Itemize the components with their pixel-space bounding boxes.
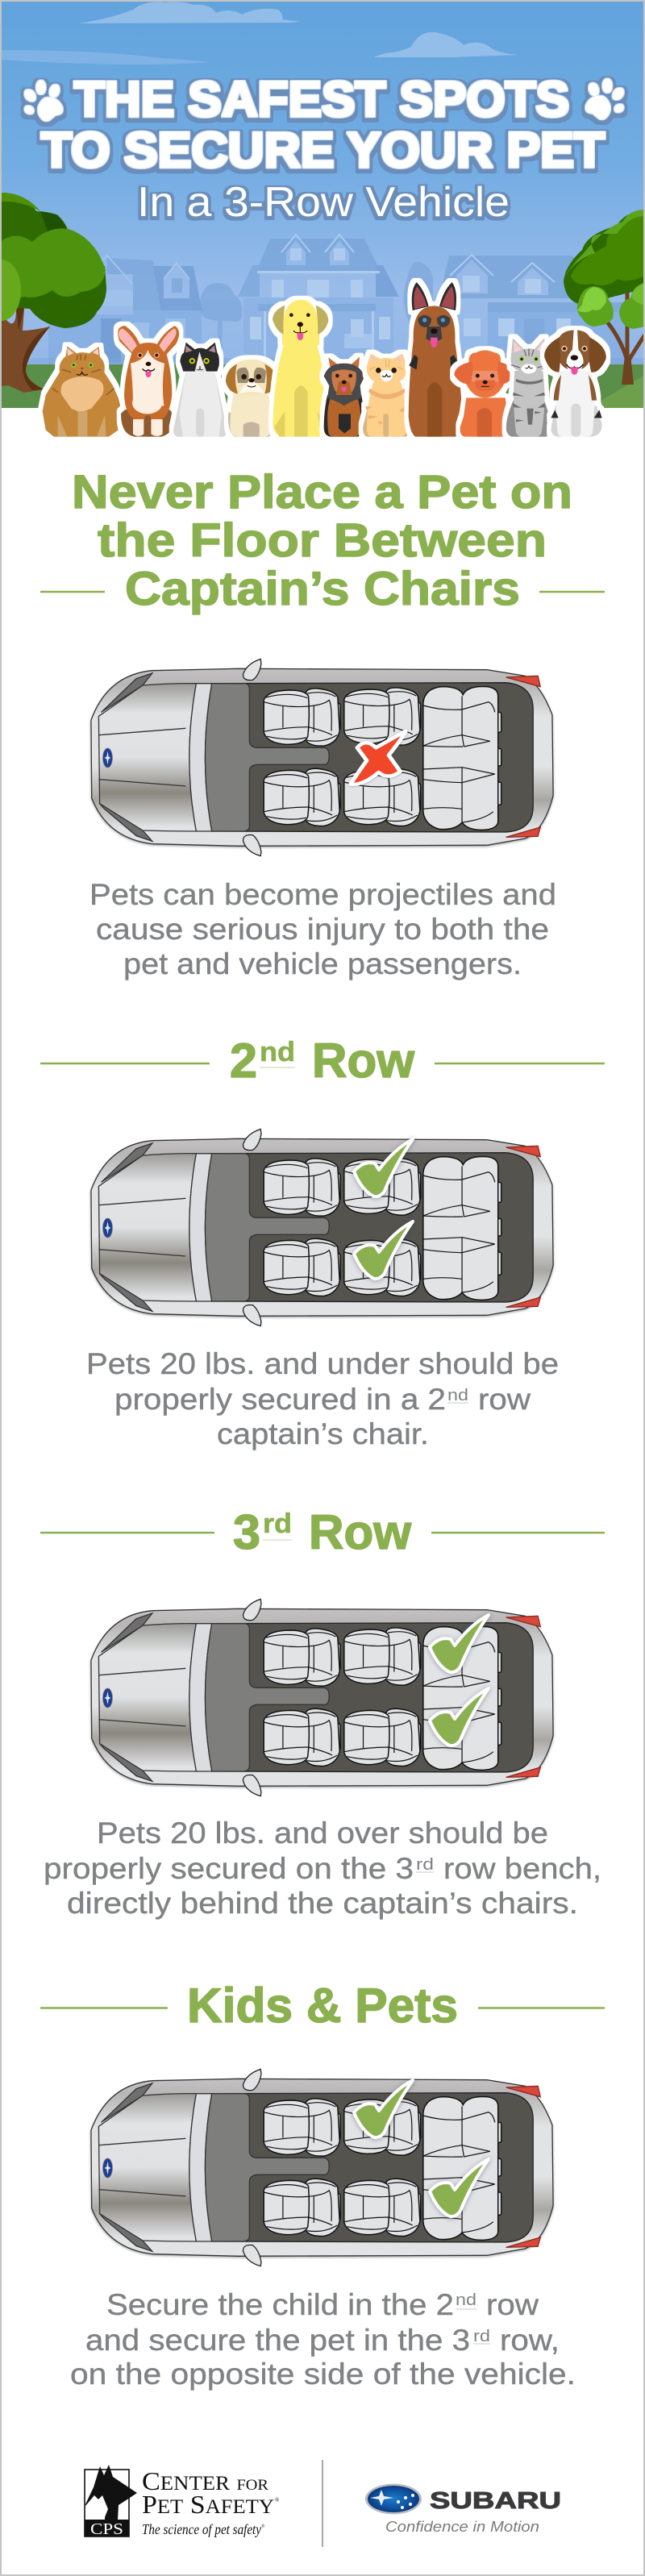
description (86, 1347, 559, 1450)
description: captain’s chair. (217, 1417, 429, 1450)
wordmark: The science of pet safety (142, 2521, 261, 2537)
description: properly secured on the 3 (44, 1852, 414, 1885)
left house (48, 256, 202, 367)
icon: check (430, 1615, 489, 1672)
wordmark: SUBARU (430, 2488, 561, 2514)
heading: 3rd row (40, 1505, 605, 1559)
icon: check (354, 1221, 413, 1279)
description (70, 2288, 576, 2391)
subtitle: In a 3-Row Vehicle (137, 179, 510, 226)
heading: never place a pet: the Floor Between (98, 514, 547, 567)
heading: never place a pet: Captain’s Chairs (125, 563, 520, 615)
title line 1: THE SAFEST SPOTS (74, 72, 569, 127)
title line 2: TO SECURE YOUR PET (41, 123, 605, 177)
description (44, 1817, 601, 1920)
description: Pets 20 lbs. and under should be (86, 1347, 559, 1380)
background blue tree and bush (199, 262, 433, 355)
heading: never place a pet (40, 466, 605, 615)
description: row bench, (443, 1852, 601, 1885)
pet: long-haired orange cat (43, 346, 123, 437)
heading: never place a pet: Never Place a Pet on (72, 466, 572, 518)
pet: red poodle (454, 350, 514, 437)
icon: subaru oval (365, 2483, 422, 2514)
pet: tuxedo cat (173, 343, 227, 437)
wordmark: CENTER FOR (142, 2466, 268, 2495)
pet: shih tzu (226, 360, 277, 437)
description: nd (456, 2291, 476, 2309)
icon: right paw print (585, 78, 626, 119)
grass (0, 364, 645, 408)
pet: corgi (118, 326, 179, 437)
right tree (564, 210, 645, 385)
description: nd (447, 1387, 468, 1405)
pet: beagle (544, 330, 606, 437)
logo: subaru (365, 2483, 561, 2535)
description: properly secured in a 2 (114, 1383, 446, 1416)
heading: 2nd row: nd (260, 1037, 295, 1067)
description (89, 878, 556, 980)
description: Pets can become projectiles and (89, 878, 556, 911)
icon: check (430, 1688, 489, 1746)
pet: yellow labrador (273, 300, 328, 437)
car diagram with two checks (91, 1599, 553, 1796)
panel: 2nd row (40, 1034, 605, 1450)
wordmark: ® (261, 2524, 265, 2529)
icon: check (354, 2080, 413, 2137)
panel: kids and pets (40, 1979, 605, 2391)
description: cause serious injury to both the (96, 913, 549, 946)
pet: orange tabby cat (363, 354, 410, 437)
heading: 2nd row: 2 (230, 1034, 257, 1088)
car diagram with two checks (91, 2069, 553, 2266)
header scene: sky, houses, trees (0, 0, 645, 408)
icon: check (354, 1139, 413, 1196)
icon: left paw print (22, 80, 63, 121)
left tree (0, 193, 106, 393)
heading: 2nd row: Row (312, 1034, 414, 1088)
description: Secure the child in the 2 (106, 2288, 454, 2321)
panel: 3rd row (40, 1505, 605, 1920)
pet: gray tabby cat (506, 338, 552, 437)
icon: check (430, 2159, 489, 2216)
right house (435, 255, 633, 367)
icon: red X (351, 731, 406, 784)
heading: 3rd row: rd (263, 1509, 292, 1539)
divider (322, 2460, 323, 2547)
tagline: Confidence in Motion (385, 2519, 539, 2535)
description: directly behind the captain’s chairs. (67, 1887, 578, 1920)
description: on the opposite side of the vehicle. (70, 2358, 576, 2391)
heading: kids and pets: Kids & Pets (187, 1979, 458, 2033)
description: row (478, 1383, 531, 1416)
description: Pets 20 lbs. and over should be (97, 1817, 548, 1850)
wordmark: PET SAFETY (142, 2490, 274, 2519)
panel: never place a pet on the floor (40, 466, 605, 980)
description: row (486, 2288, 539, 2321)
car diagram with X mark (91, 659, 553, 856)
pets group right (324, 282, 606, 437)
pet: german shepherd (409, 282, 463, 437)
pet: yorkshire terrier (324, 357, 364, 437)
icon: dog and cat badge: CPS (90, 2520, 123, 2538)
description: and secure the pet in the 3 (85, 2324, 470, 2357)
description: row, (500, 2324, 560, 2357)
title lockup (22, 72, 626, 177)
wordmark: ® (275, 2497, 280, 2503)
icon: dog and cat badge (85, 2465, 137, 2538)
wordmark (142, 2466, 280, 2537)
pets group left (43, 300, 328, 437)
car diagram with two checks (91, 1129, 553, 1326)
description: pet and vehicle passengers. (123, 947, 522, 980)
clouds (0, 2, 519, 65)
heading: 3rd row: Row (309, 1505, 411, 1559)
description: rd (416, 1856, 434, 1874)
description: rd (473, 2328, 490, 2345)
logo: center for pet safety (85, 2465, 280, 2538)
heading: 2nd row (40, 1034, 605, 1088)
center house (238, 235, 399, 370)
heading: 3rd row: 3 (233, 1505, 260, 1559)
